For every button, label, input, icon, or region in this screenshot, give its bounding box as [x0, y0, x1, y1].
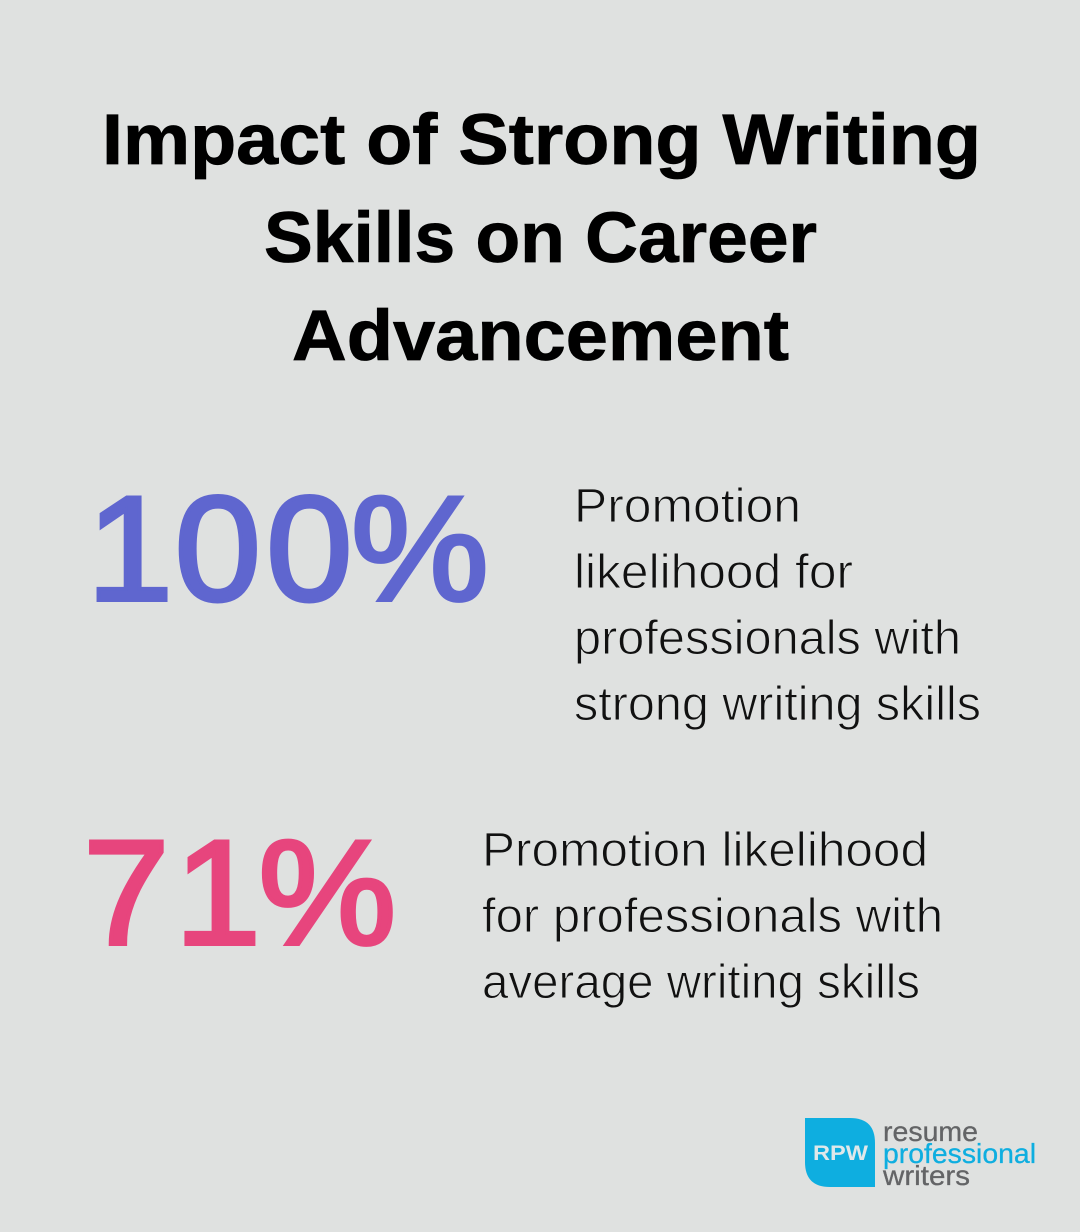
description: strong writing skills: Promotion — [574, 480, 801, 533]
description: strong writing skills: strong writing skills — [574, 678, 981, 731]
description: average writing skills: for professionals with — [482, 890, 943, 943]
logo wordmark: resume — [883, 1116, 978, 1147]
title — [102, 101, 981, 376]
title: Skills on Career — [264, 199, 817, 278]
logo wordmark — [882, 1116, 1036, 1191]
logo wordmark: writers — [882, 1160, 970, 1191]
title: Impact of Strong Writing — [102, 101, 981, 180]
logo: resume professional writers — [805, 1116, 1036, 1191]
description: average writing skills: average writing skills — [482, 956, 920, 1009]
title: Advancement — [292, 297, 789, 376]
logo wordmark: professional — [883, 1138, 1036, 1169]
description: average writing skills: Promotion likelihood — [482, 824, 928, 877]
stat: 71%: 71% — [83, 810, 396, 976]
description: strong writing skills: professionals with — [574, 612, 961, 665]
description: strong writing skills — [574, 480, 981, 731]
icon: RPW badge — [805, 1118, 875, 1187]
description: strong writing skills: likelihood for — [574, 546, 853, 599]
stat: 100%: 100% — [87, 466, 489, 632]
icon: RPW badge: RPW — [813, 1142, 868, 1165]
description: average writing skills — [482, 824, 943, 1009]
